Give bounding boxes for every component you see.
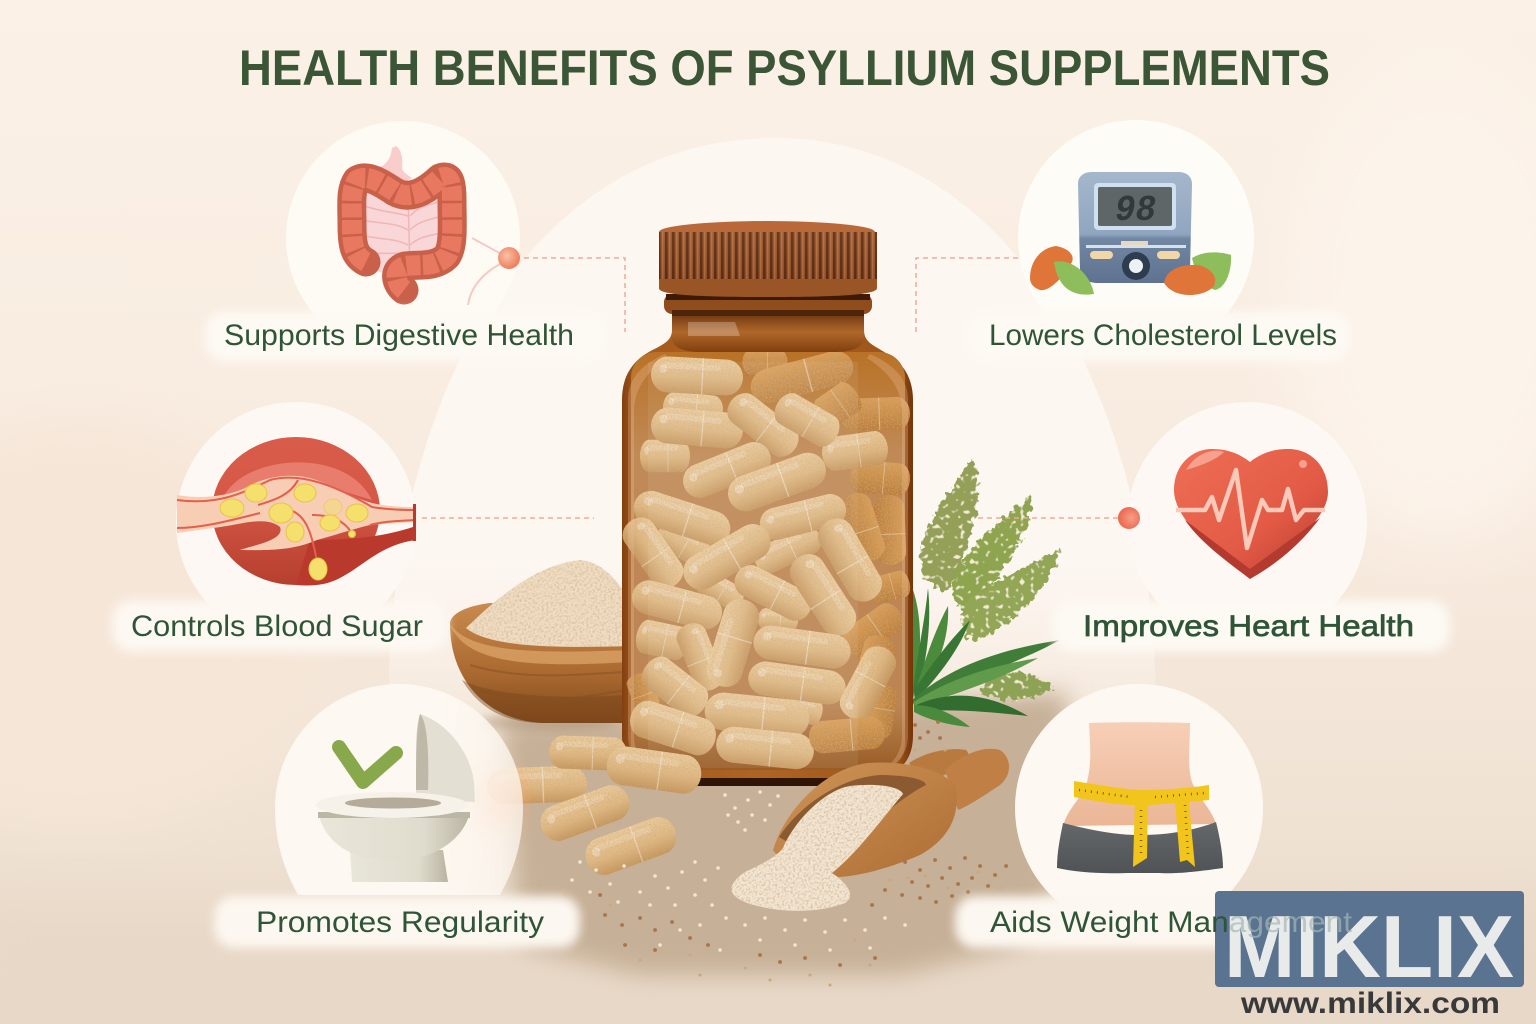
label strip: aids weight management [955,896,1355,948]
jar glass body [622,310,913,778]
icon: nuts and leaves [1030,246,1231,295]
title: HEALTH BENEFITS OF PSYLLIUM SUPPLEMENTS [239,40,1330,96]
jar interior [631,352,905,770]
icon: blood meter: 98 [1115,190,1156,231]
callout: regularity [275,684,523,895]
icon: toilet [316,714,475,882]
icon: blood meter [1078,172,1192,283]
spilled husk powder [731,785,903,911]
circle badge [286,121,520,355]
callout: heart health [1127,402,1367,642]
wooden table surface [500,692,1068,975]
icon: measuring tape [1074,781,1209,867]
central arch panel [389,138,1156,760]
icon: dark shorts [1057,822,1223,873]
seed spikes [920,458,1060,699]
connector: blood sugar [422,517,594,519]
connector: digestive [468,238,625,332]
label: improves heart health [1052,600,1450,652]
connector: heart [978,507,1140,529]
circle badge [1018,120,1254,356]
wooden bowl with psyllium husk [450,560,630,730]
loose capsules [486,735,704,880]
plantain plant [912,458,1060,727]
icon: artery with glucose [177,437,416,585]
callout: digestive health [286,121,520,355]
label: promotes regularity: Promotes Regularity [256,906,544,939]
label: supports digestive health [205,311,605,362]
jar base shadow [640,772,895,786]
wooden scoop [773,749,1009,877]
callout: weight management [1015,684,1263,932]
circle badge [1127,402,1367,642]
label: lowers cholesterol levels: Lowers Cholesterol Levels [989,319,1337,352]
amber supplement jar [617,221,913,786]
circle badge [1015,684,1263,932]
leaves [912,588,1060,727]
glass highlights [628,354,908,772]
connector: cholesterol [916,258,1018,332]
warm glow behind badge [469,770,521,830]
label: controls blood sugar: Controls Blood Sugar [131,610,423,643]
jar cap [659,221,877,297]
icon: intestine [352,146,452,290]
icon: green check mark [339,747,396,782]
label: improves heart health: Improves Heart Health [1083,610,1414,643]
callout: blood sugar [176,402,416,642]
circle badge [176,402,416,642]
capsules inside jar [617,347,913,771]
jar neck [664,294,872,352]
label: supports digestive health: Supports Digestive Health [224,319,574,352]
scattered seeds [565,722,1006,985]
label: lowers cholesterol levels [965,311,1350,362]
label text: aids weight management: Aids Weight Man agement [990,906,1353,939]
watermark: Miklix: MIKLIX [1224,897,1514,996]
label: controls blood sugar [112,600,447,652]
circle badge [275,684,523,895]
icon: heart with ECG [1174,449,1328,579]
icon: waist torso [1063,722,1216,826]
watermark: Miklix: www.miklix.com [1240,987,1500,1020]
label: promotes regularity [214,896,580,948]
callout: cholesterol [1018,120,1254,356]
